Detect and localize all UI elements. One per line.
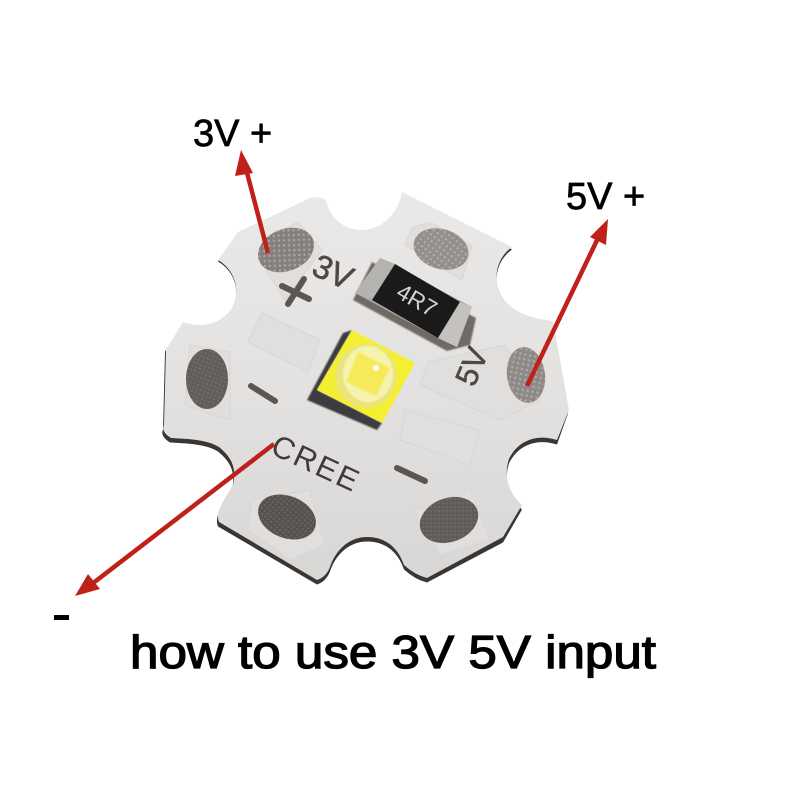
resistor 4R7: 4R7 — [392, 278, 442, 322]
solder pad: top right — [408, 222, 474, 276]
minus mark: left — [251, 386, 275, 401]
3V label: 3V — [307, 247, 359, 297]
LED emitter — [307, 330, 415, 430]
CREE label: CREE — [266, 428, 366, 499]
solder pad: top left — [251, 220, 321, 280]
arrow: 3V plus — [235, 150, 268, 253]
solder pad: right — [503, 345, 549, 405]
label: 5V plus: 5V + — [566, 176, 645, 218]
label: minus — [54, 615, 69, 620]
star circuit board — [162, 192, 569, 584]
silkscreen trace outlines — [185, 222, 540, 560]
plus mark — [282, 279, 309, 304]
resistor 4R7 — [353, 258, 476, 351]
solder pad: left — [186, 349, 228, 409]
solder pad: bottom left — [251, 486, 323, 548]
arrow: minus — [75, 444, 274, 596]
minus mark: right — [397, 468, 425, 481]
label: 3V plus: 3V + — [193, 113, 272, 155]
5V label: 5V — [448, 342, 495, 391]
solder pad: bottom right — [413, 489, 485, 551]
title: how to use 3V 5V input — [130, 626, 656, 678]
arrow: 5V plus — [527, 219, 608, 386]
